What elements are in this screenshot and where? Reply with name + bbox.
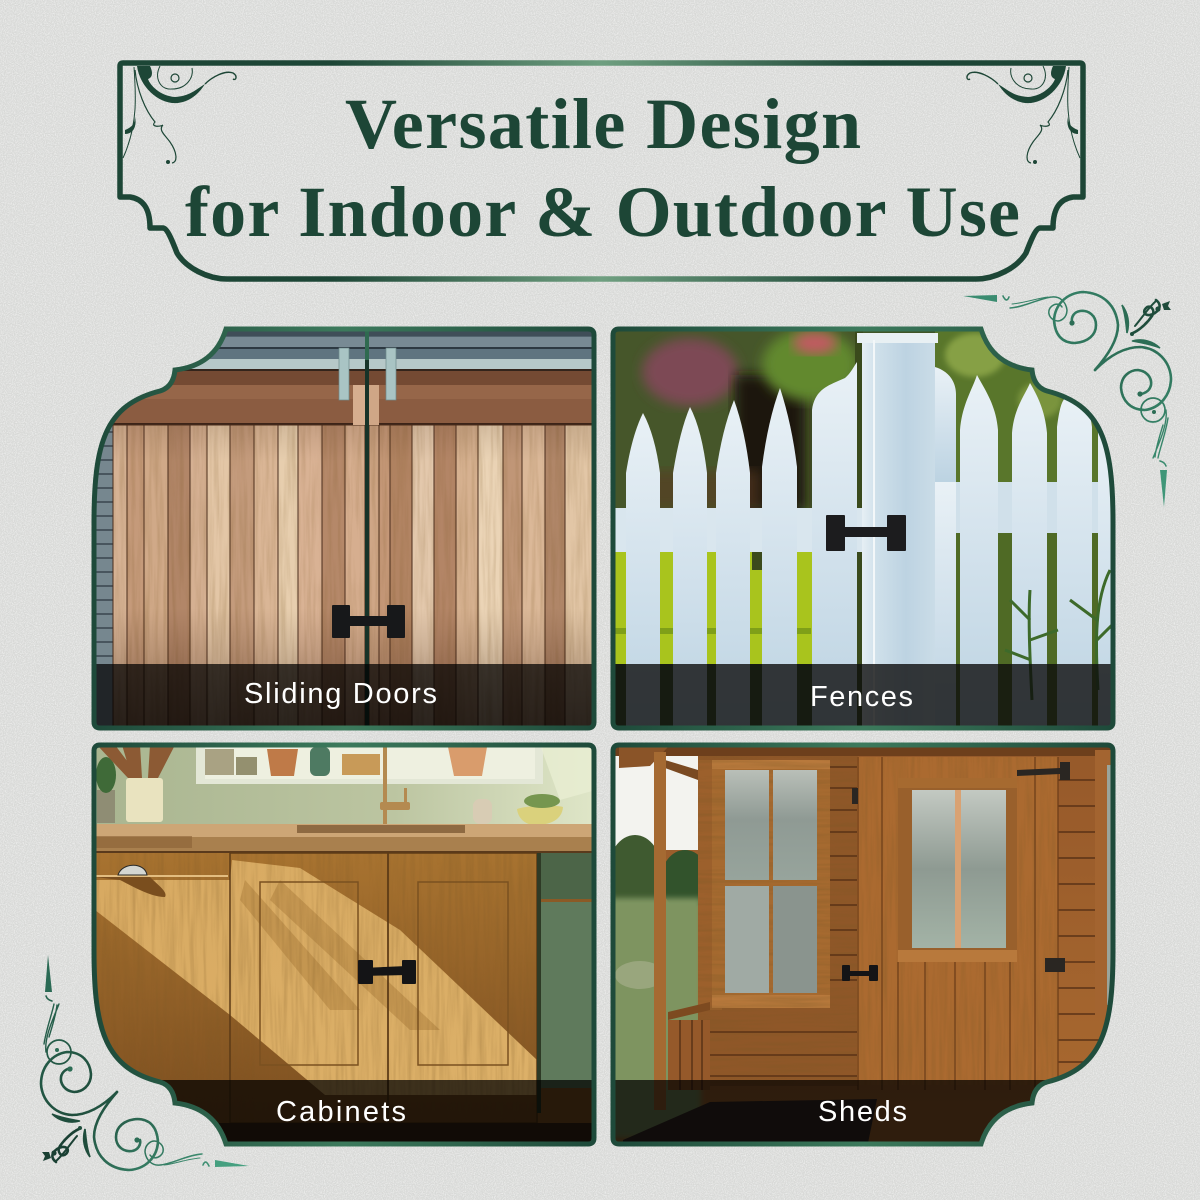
cabinet doors bbox=[96, 853, 536, 1095]
caption: sheds: Sheds bbox=[818, 1096, 907, 1128]
galvanised straps bbox=[339, 348, 396, 400]
right post and side window bbox=[1095, 750, 1113, 1015]
latch hardware bbox=[826, 515, 906, 551]
photo: kitchen cabinets bbox=[92, 743, 596, 1148]
light door stiles bbox=[353, 385, 379, 425]
photo: white picket fence bbox=[611, 327, 1115, 733]
wall siding bbox=[710, 767, 1113, 1076]
landscape bbox=[616, 756, 700, 1137]
ornament: top-right corner bbox=[967, 66, 1080, 164]
door window bbox=[898, 778, 1017, 962]
latch hardware bbox=[332, 605, 405, 638]
post bbox=[857, 333, 938, 730]
caption bar bbox=[92, 664, 596, 730]
panel border bbox=[94, 745, 594, 1144]
garden background bbox=[616, 332, 1098, 664]
latch hardware bbox=[358, 960, 416, 984]
door frames bbox=[230, 853, 537, 1123]
rails bbox=[615, 482, 1115, 552]
ornament: bottom-left flourish bbox=[41, 955, 249, 1170]
roof fascia bbox=[184, 332, 592, 371]
blue siding bbox=[96, 426, 112, 726]
title: for Indoor & Outdoor Use bbox=[185, 172, 1020, 252]
plants and pots bbox=[96, 747, 487, 823]
utensil crock bbox=[97, 745, 175, 822]
latch hardware bbox=[842, 965, 878, 981]
pickets bbox=[626, 362, 1113, 730]
vertical planks bbox=[113, 425, 595, 730]
caption: sliding doors: Sliding Doors bbox=[244, 678, 437, 710]
railing bbox=[668, 1002, 710, 1090]
ornament: top-left corner bbox=[123, 66, 236, 164]
title bbox=[185, 84, 1020, 252]
countertop bbox=[92, 824, 596, 853]
photo: wooden sliding barn doors bbox=[92, 327, 596, 730]
wall bbox=[92, 743, 596, 825]
panel: fences bbox=[611, 327, 1115, 733]
panel: sliding doors bbox=[92, 327, 596, 730]
caption bar bbox=[611, 664, 1115, 730]
frame outline bbox=[120, 63, 1083, 279]
left wall and window frame bbox=[698, 756, 858, 1086]
door bbox=[857, 757, 1058, 1090]
picnic table bbox=[623, 1099, 877, 1148]
green cabinet bbox=[537, 853, 596, 1113]
header frame with title bbox=[120, 63, 1083, 279]
panel border bbox=[613, 745, 1113, 1144]
caption bar bbox=[162, 1080, 592, 1142]
panel: sheds bbox=[607, 743, 1115, 1148]
caption: cabinets: Cabinets bbox=[276, 1096, 406, 1128]
panel border bbox=[94, 329, 594, 728]
photo: wooden shed bbox=[607, 743, 1115, 1148]
floor shadow bbox=[218, 1123, 592, 1142]
shrub bbox=[1005, 570, 1112, 700]
window glass bbox=[725, 770, 817, 993]
caption: fences: Fences bbox=[810, 681, 913, 713]
panel: cabinets bbox=[92, 743, 596, 1148]
faucet bbox=[380, 745, 410, 825]
window bbox=[196, 743, 596, 800]
header boards bbox=[113, 371, 595, 425]
hinges bbox=[852, 762, 1070, 972]
ornament: right flourish bbox=[963, 292, 1171, 507]
caption bar bbox=[611, 1080, 1115, 1148]
panel border bbox=[613, 329, 1113, 728]
roof and post bbox=[611, 743, 1115, 1110]
bowl and jar bbox=[473, 794, 563, 825]
center gap bbox=[365, 360, 369, 730]
title: Versatile Design bbox=[345, 84, 861, 164]
